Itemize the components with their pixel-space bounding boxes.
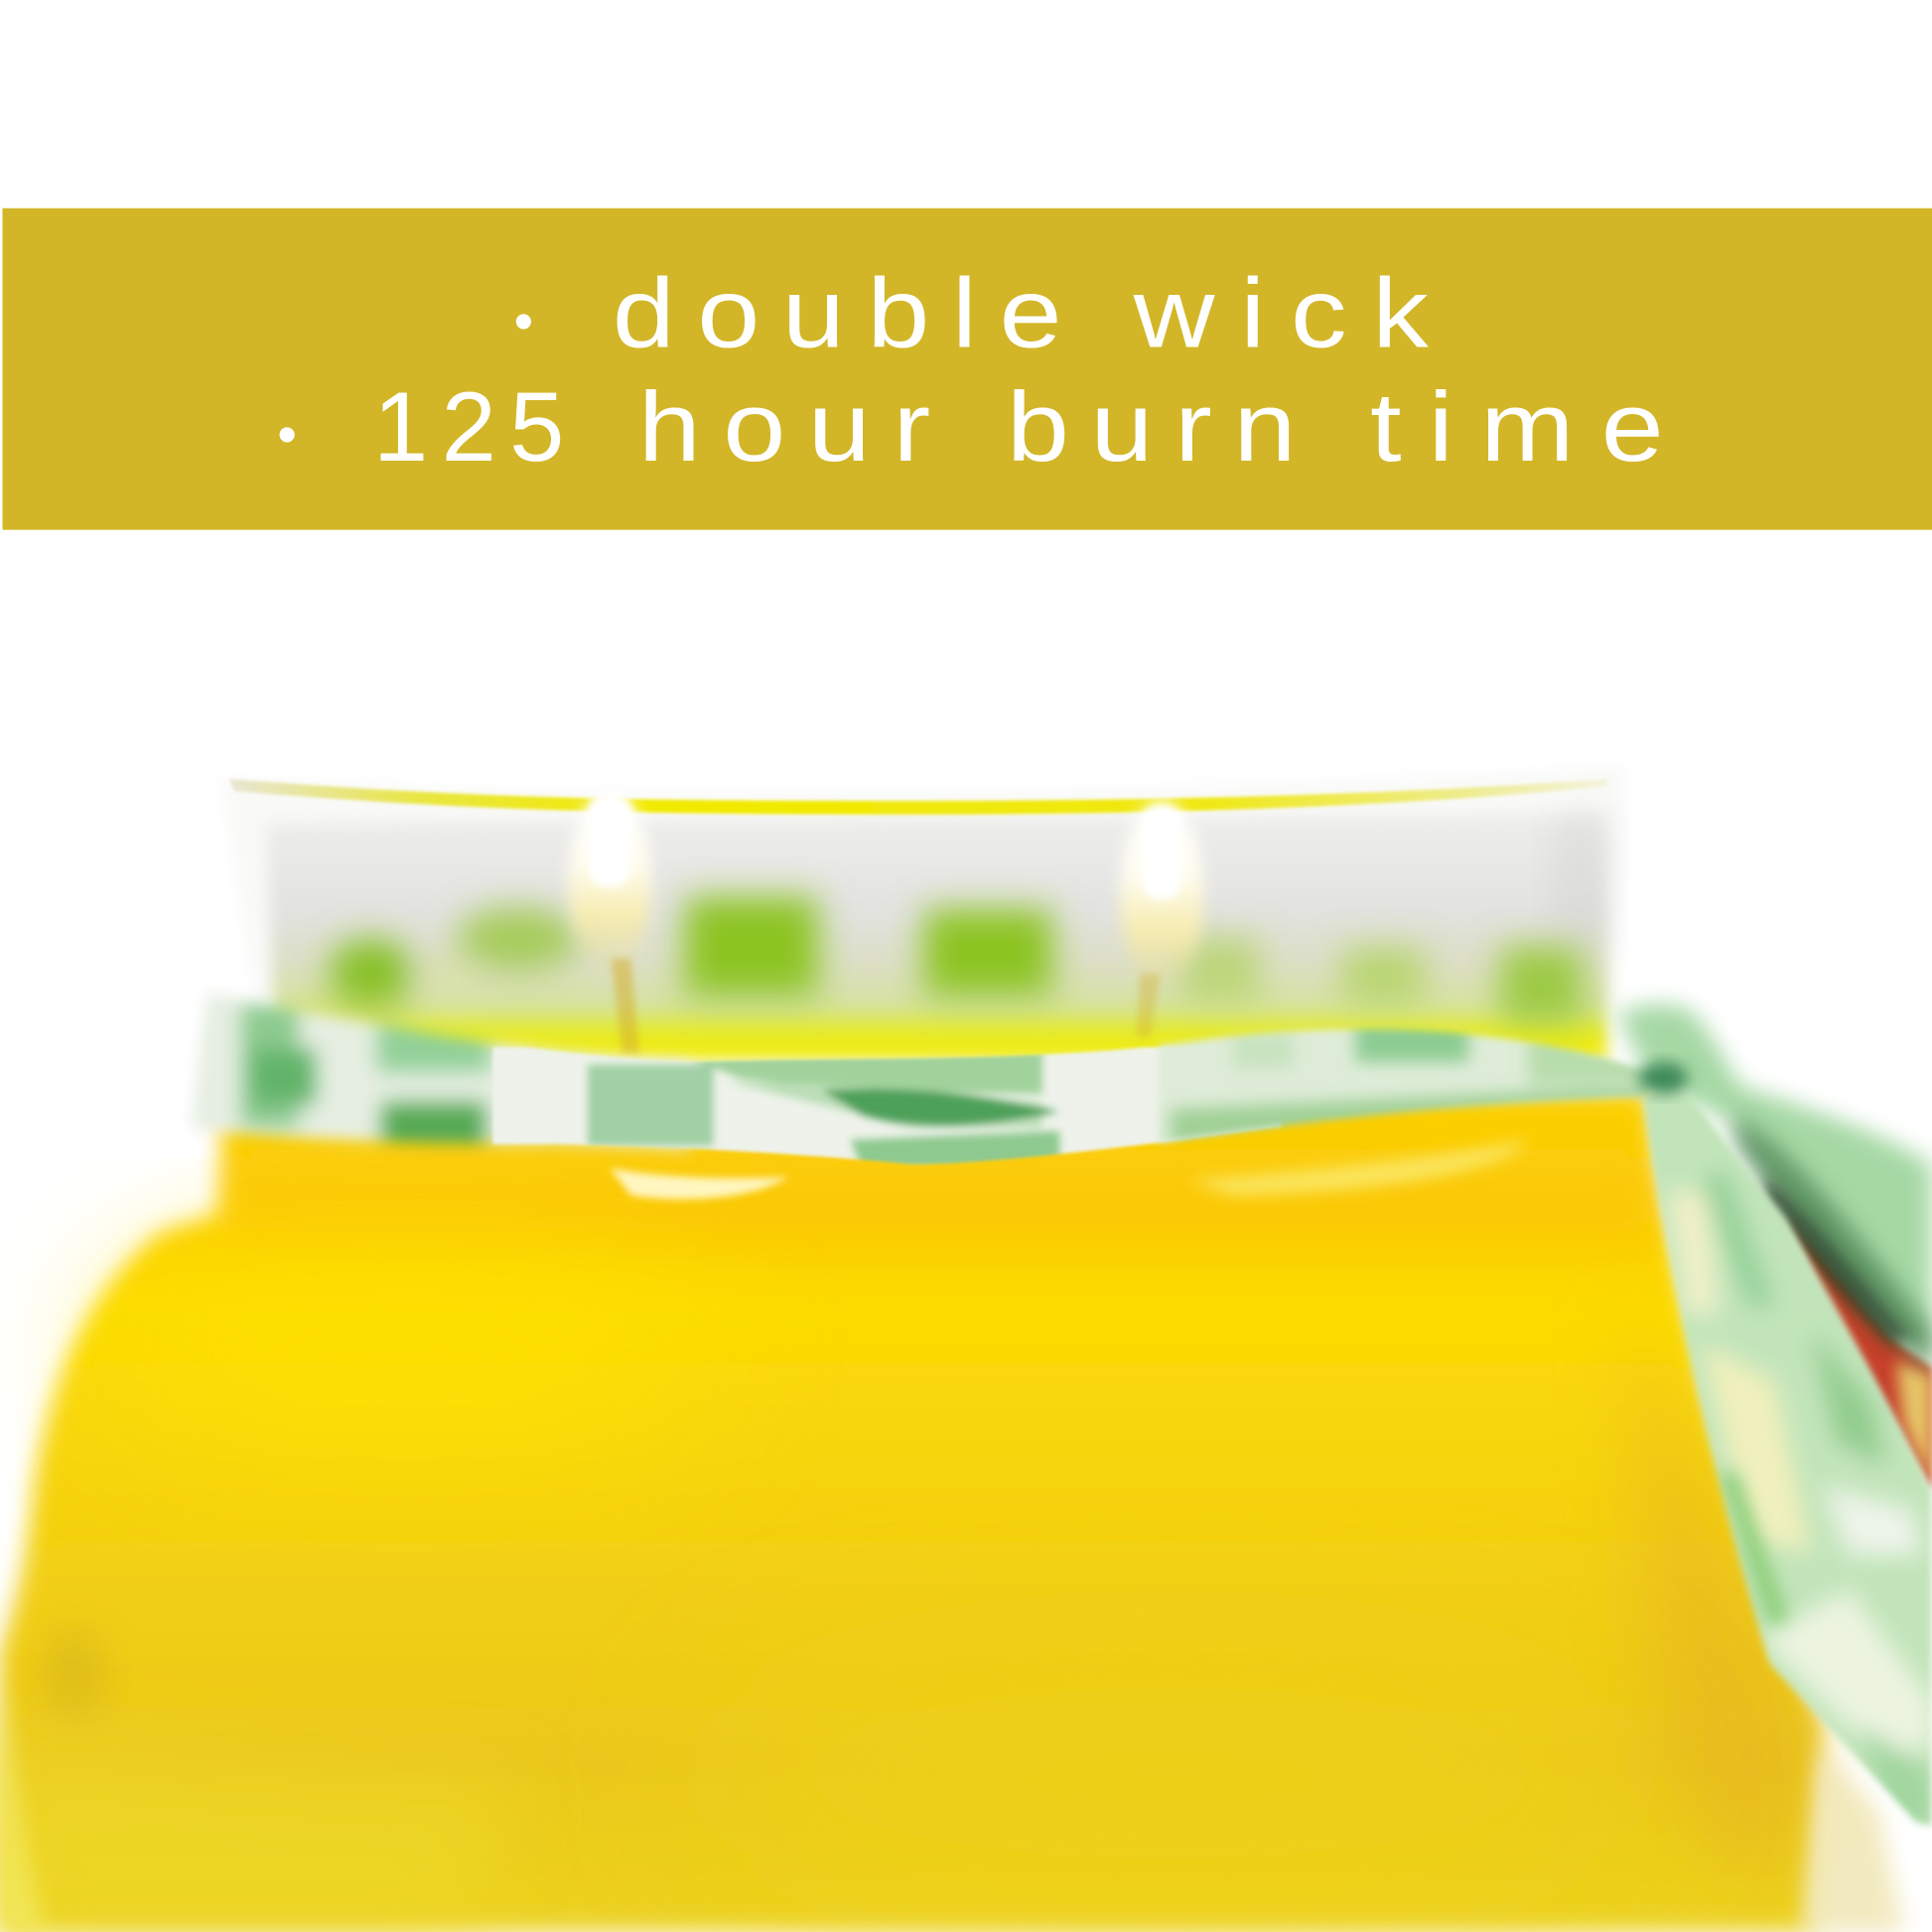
banner line: double wick: double <box>613 258 1062 368</box>
front tail <box>1626 1072 1932 1849</box>
rim yellow line <box>229 778 1608 814</box>
banner line: 125 hour burn time: hour <box>638 372 930 483</box>
banner line: 125 hour burn time: • <box>277 403 297 466</box>
band: sharp centre section <box>492 1044 1282 1171</box>
banner line: 125 hour burn time: burn <box>1007 372 1296 483</box>
right pale edge <box>1801 1749 1903 1932</box>
yellow wax body <box>0 1090 1903 1932</box>
banner <box>2 208 1932 530</box>
right orange shade <box>1626 1294 1811 1897</box>
banner line: 125 hour burn time: time <box>1370 372 1664 483</box>
banner line: double wick: • <box>514 290 533 352</box>
red inner fabric <box>1785 1213 1932 1491</box>
back tail <box>1618 1005 1932 1361</box>
band: soft right section <box>1154 1024 1648 1148</box>
right flame <box>1120 801 1204 1037</box>
knot <box>1639 1062 1688 1094</box>
lower pale glass <box>0 1688 45 1932</box>
gingham ribbon band <box>189 991 1648 1168</box>
banner line: double wick <box>514 258 1430 368</box>
banner line: 125 hour burn time <box>277 372 1664 483</box>
banner line: double wick: wick <box>1133 258 1430 368</box>
neck highlights <box>610 1169 788 1199</box>
orange neck shading <box>234 1182 1651 1244</box>
ribbon tail and knot <box>1618 1005 1932 1849</box>
green wax reflections <box>296 897 1583 1041</box>
glass rim and upper jar <box>221 766 1626 1084</box>
banner line: 125 hour burn time: 125 <box>373 372 564 483</box>
bright left glow <box>111 1257 702 1453</box>
candle jar photograph <box>0 766 1932 1932</box>
left flame <box>568 792 652 1054</box>
band: soft left section <box>189 991 699 1161</box>
left dark shade <box>42 1626 106 1725</box>
